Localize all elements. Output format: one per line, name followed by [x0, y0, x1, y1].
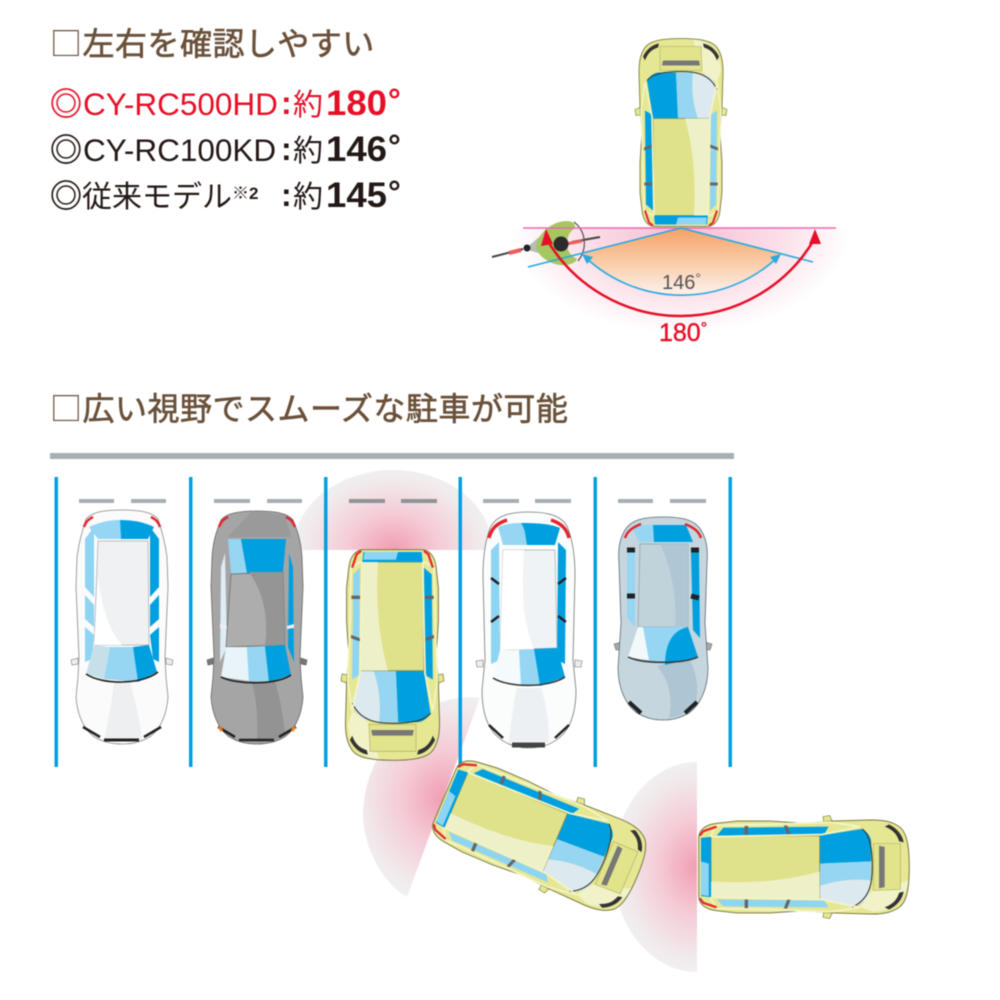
spec row: conventional model 145 degrees: [50, 171, 401, 217]
white car bay 4: [476, 512, 582, 748]
146 degree field of view wedge: [583, 228, 780, 294]
spec row: CY-RC100KD 146 degrees: ◎: [50, 125, 82, 171]
spec row: CY-RC100KD 146 degrees: :: [281, 131, 292, 167]
spec row: CY-RC100KD 146 degrees: [50, 125, 401, 171]
view fan: rear of the reversing car: [363, 697, 480, 897]
spec row: CY-RC500HD 180 degrees: [50, 79, 401, 125]
spec row: conventional model 145 degrees: ※2: [232, 184, 258, 203]
lot boundary bar: [50, 453, 734, 459]
white car bay 1: [71, 510, 173, 744]
spec row: CY-RC100KD 146 degrees: °: [388, 128, 401, 164]
light blue car bay 5: [614, 517, 712, 720]
spec row: CY-RC100KD 146 degrees: CY-RC100KD: [83, 132, 276, 168]
spec row: CY-RC100KD 146 degrees: 146: [326, 130, 387, 169]
146 degree arc arrow: [582, 254, 781, 295]
spec row: CY-RC100KD 146 degrees: 約: [293, 135, 323, 168]
spec row: conventional model 145 degrees: :: [281, 177, 292, 213]
gray car bay 2: [207, 511, 307, 744]
label: 180 degrees: °: [701, 320, 707, 337]
label: 146 degrees: °: [695, 270, 701, 286]
label: 146 degrees: 146: [662, 272, 695, 294]
bay lines: [54, 477, 732, 767]
view angle diagram: [492, 38, 851, 347]
label: 180 degrees: 180: [659, 319, 701, 347]
spec row: CY-RC500HD 180 degrees: :: [281, 85, 292, 121]
180 degree field of view glow: [511, 228, 851, 333]
heading: smooth parking with wide view: □広い視野でスムーズな駐車が可能: [50, 384, 568, 430]
view fan: front of the following car: [613, 762, 697, 972]
146 degree boundary lines: [528, 228, 813, 267]
spec row: CY-RC500HD 180 degrees: 180: [326, 84, 387, 123]
heading: easy to check left and right: □左右を確認しやすい: [50, 19, 375, 65]
yellow car approaching from the right: [699, 815, 909, 919]
spec row: CY-RC500HD 180 degrees: ◎: [50, 79, 82, 125]
spec row: CY-RC500HD 180 degrees: °: [388, 82, 401, 118]
spec row: conventional model 145 degrees: 145: [326, 176, 387, 215]
spec row: CY-RC500HD 180 degrees: 約: [293, 89, 323, 122]
spec row: conventional model 145 degrees: °: [388, 174, 401, 210]
yellow car reversing at an angle: [425, 748, 657, 924]
top view car on the stop line: [635, 38, 727, 226]
cyclist: [492, 221, 600, 265]
spec row: CY-RC500HD 180 degrees: CY-RC500HD: [83, 86, 278, 122]
parking lot: [50, 453, 909, 972]
180 degree horizon line: [523, 227, 836, 229]
spec row: conventional model 145 degrees: 従来モデル: [82, 181, 232, 214]
wheel stop dashes: [79, 499, 706, 503]
view fan shape: top of the bay: [297, 470, 490, 550]
spec row: conventional model 145 degrees: 約: [293, 181, 323, 214]
180 degree arc arrow: [541, 229, 821, 316]
spec row: conventional model 145 degrees: ◎: [50, 171, 82, 217]
yellow car parked in bay 3: [341, 550, 444, 760]
